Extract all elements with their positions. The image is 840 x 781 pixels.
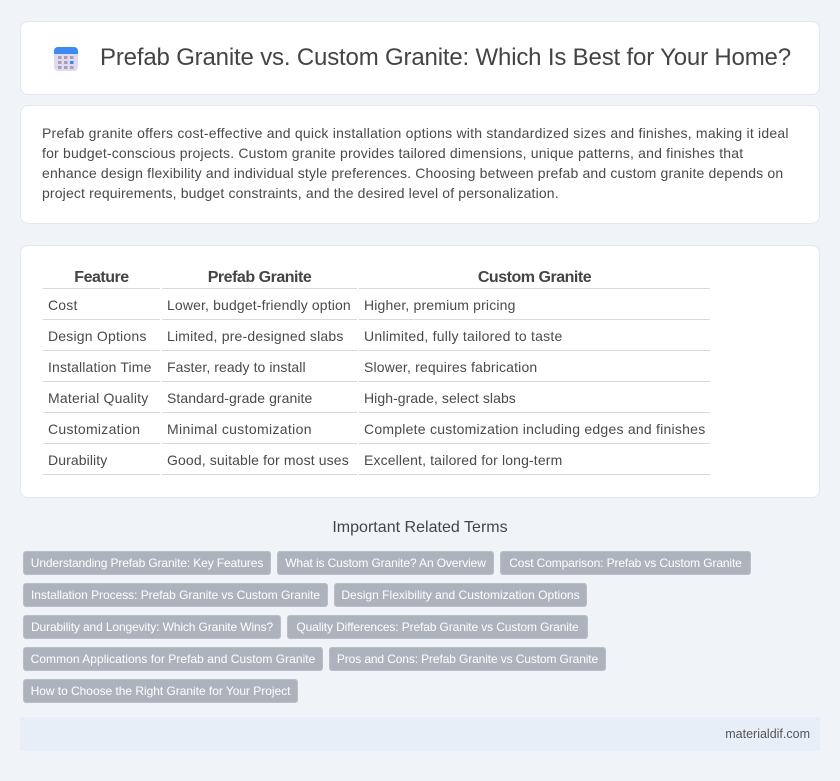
table header: Feature: Feature xyxy=(74,269,129,286)
panel: comparison table xyxy=(20,245,820,498)
table header: Custom Granite: Custom Granite xyxy=(478,269,591,286)
row: design options: Design Options xyxy=(48,328,147,344)
tag: What is Custom Granite? An Overview xyxy=(285,556,486,570)
intro text xyxy=(42,125,789,201)
tag xyxy=(329,647,606,671)
panel: comparison table: Slower, requires fabrication xyxy=(364,359,537,375)
related term tags xyxy=(23,551,751,703)
tag: How to Choose the Right Granite for Your Project xyxy=(31,684,290,698)
heading: related terms: Important Related Terms xyxy=(332,519,508,536)
panel: comparison table: Limited, pre-designed slabs xyxy=(167,328,344,344)
tag: Quality Differences: Prefab Granite vs Custom Granite xyxy=(296,620,579,634)
footer source: materialdif.com xyxy=(725,727,810,741)
panel: comparison table: Minimal customization xyxy=(167,421,312,437)
tag xyxy=(23,615,281,639)
panel: comparison table: Good, suitable for most uses xyxy=(167,452,349,468)
intro text: project requirements, budget constraints, and the desired level of personalization. xyxy=(42,185,559,201)
panel: comparison table: Standard-grade granite xyxy=(167,390,312,406)
tag xyxy=(23,647,323,671)
row: durability: Durability xyxy=(48,452,107,468)
heading: Prefab Granite vs. Custom Granite: Which Is Best for Your Home? xyxy=(100,44,791,71)
panel: title xyxy=(20,21,820,95)
tag: Durability and Longevity: Which Granite Wins? xyxy=(31,620,273,634)
row: material quality: Material Quality xyxy=(48,390,148,406)
tag xyxy=(23,551,271,575)
icon: calendar xyxy=(54,47,78,71)
panel: comparison table: Excellent, tailored for long-term xyxy=(364,452,562,468)
intro text: for budget-conscious projects. Custom granite provides tailored dimensions, unique patterns, and finishes that xyxy=(42,145,743,161)
table header: Prefab Granite: Prefab Granite xyxy=(208,269,311,286)
tag xyxy=(500,551,751,575)
intro text: Prefab granite offers cost-effective and quick installation options with standardized sizes and finishes, making it ideal xyxy=(42,125,789,141)
panel: introduction xyxy=(20,105,820,224)
tag: Pros and Cons: Prefab Granite vs Custom Granite xyxy=(337,652,598,666)
panel: comparison table: Complete customization including edges and finishes xyxy=(364,421,705,437)
panel: comparison table: Faster, ready to install xyxy=(167,359,306,375)
footer xyxy=(20,717,820,751)
row: installation time: Installation Time xyxy=(48,359,152,375)
tag: Design Flexibility and Customization Options xyxy=(341,588,580,602)
tag: Cost Comparison: Prefab vs Custom Granite xyxy=(509,556,742,570)
row: customization: Customization xyxy=(48,421,140,437)
tag: Installation Process: Prefab Granite vs Custom Granite xyxy=(31,588,320,602)
tag xyxy=(334,583,587,607)
tag xyxy=(23,583,328,607)
tag xyxy=(287,615,588,639)
row: cost: Cost xyxy=(48,297,78,313)
tag xyxy=(277,551,494,575)
panel: comparison table: Lower, budget-friendly option xyxy=(167,297,351,313)
tag: Understanding Prefab Granite: Key Features xyxy=(31,556,263,570)
intro text: enhance design flexibility and individual style preferences. Choosing between prefab and custom granite depends on xyxy=(42,165,783,181)
tag xyxy=(23,679,298,703)
panel: comparison table: High-grade, select slabs xyxy=(364,390,516,406)
panel: comparison table: Higher, premium pricing xyxy=(364,297,516,313)
tag: Common Applications for Prefab and Custom Granite xyxy=(31,652,315,666)
panel: comparison table: Unlimited, fully tailored to taste xyxy=(364,328,562,344)
